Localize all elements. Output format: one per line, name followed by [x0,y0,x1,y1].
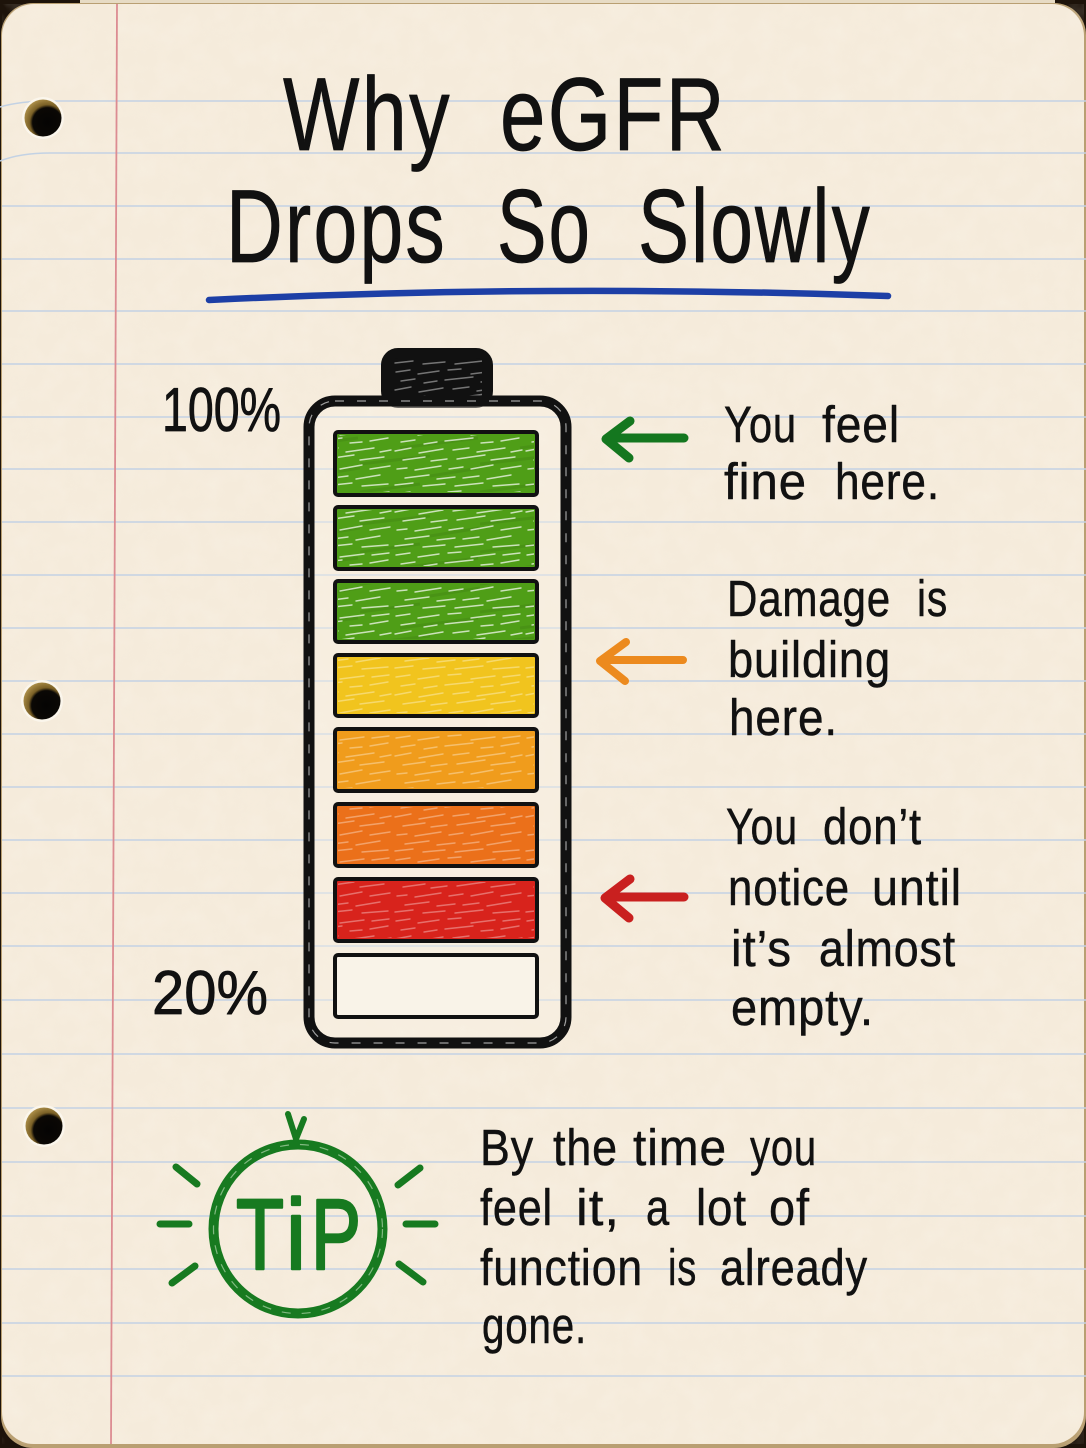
note: you feel fine: fine [724,453,807,510]
note: you don't notice [726,798,962,1036]
tip text: it, [576,1179,620,1236]
cell: orange [335,729,537,791]
tip text: time [633,1119,727,1176]
note: you don't notice: don’t [823,798,922,855]
title: Drops [226,169,447,285]
arrow: orange [600,642,683,681]
label: 100%: 100% [162,376,281,445]
tip text: is [668,1239,697,1296]
cell: empty [335,955,537,1017]
cell: yellow [335,655,537,716]
cell: dark orange [335,804,537,866]
title: Slowly [638,169,872,285]
note: you don't notice: notice [728,859,850,916]
battery cap [386,353,488,403]
note: you don't notice: until [872,859,962,916]
tip text [480,1119,868,1354]
tip badge [160,1114,435,1314]
tip text: By [480,1119,534,1176]
tip label: P [311,1179,361,1291]
tip text: gone. [482,1297,587,1354]
note: you feel fine: feel [822,396,900,453]
tip text: function [480,1239,643,1296]
tip text: of [769,1179,810,1236]
note: you don't notice: it’s [731,920,792,977]
icon: ring [214,1144,382,1314]
tip text: the [553,1119,618,1176]
title: Why [283,57,452,173]
cell: red [335,879,537,941]
battery body [309,401,566,1043]
tip text: a [646,1179,670,1236]
icon: rays [160,1167,435,1283]
note: damage is building here: is [917,570,948,627]
tip label: i [286,1179,306,1291]
note: you don't notice: empty. [731,979,874,1036]
note: you don't notice: You [726,798,798,855]
battery [309,353,566,1043]
cell: green 2 [335,507,537,569]
arrow: green [606,421,684,458]
title: So [497,169,592,285]
note: damage is building here: here. [729,689,838,746]
note: you don't notice: almost [819,920,956,977]
title [226,57,872,285]
arrow: red [605,879,684,918]
title: eGFR [500,57,727,173]
red margin line [111,4,117,1444]
cell: green 1 [335,432,537,495]
tip text: you [750,1119,817,1176]
top page edge [80,0,1055,8]
tip label: T [236,1179,284,1291]
cell: green 3 [335,581,537,642]
note: you feel fine: here. [835,453,940,510]
tip label [236,1179,361,1291]
tip text: feel [480,1179,553,1236]
title underline [209,291,888,300]
note: damage is building here [727,570,948,746]
label: 20%: 20% [152,959,268,1028]
icon: pointer [288,1114,304,1139]
tip text: already [720,1239,868,1296]
note: you feel fine [724,396,940,510]
note: you feel fine: You [724,396,797,453]
tip text: lot [696,1179,747,1236]
note: damage is building here: Damage [727,570,891,627]
binder holes [21,97,65,1147]
note: damage is building here: building [728,631,891,688]
